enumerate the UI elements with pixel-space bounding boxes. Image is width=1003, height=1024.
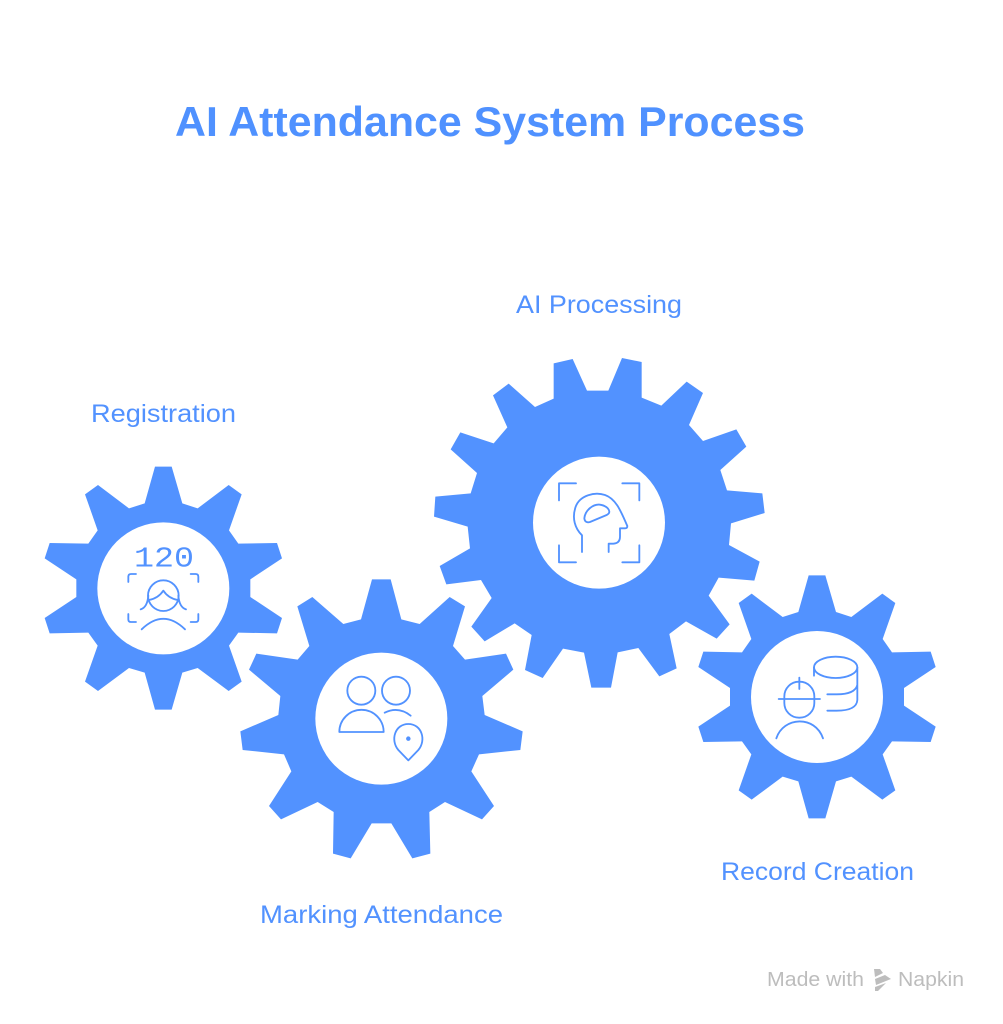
icon: people with location pin	[339, 677, 422, 760]
gear: Record Creation	[698, 575, 936, 818]
icon: Napkin logo	[874, 969, 891, 991]
label: Record Creation: Record Creation	[721, 858, 914, 886]
title: AI Attendance System Process	[175, 98, 805, 145]
icon: face scan with number: 120	[134, 543, 194, 576]
icon: face scan with number	[128, 543, 198, 629]
footer: Made with Napkin: Napkin	[898, 969, 964, 991]
icon: worker with database	[776, 657, 857, 738]
gear: AI Processing	[434, 358, 765, 688]
footer: Made with Napkin	[767, 969, 964, 991]
gear: Registration	[45, 467, 282, 710]
footer: Made with Napkin: Made with	[767, 969, 864, 991]
label: Registration: Registration	[91, 400, 236, 428]
icon: head with brain scan	[559, 483, 639, 562]
label: Marking Attendance: Marking Attendance	[260, 901, 503, 929]
gear: Marking Attendance	[240, 579, 523, 858]
label: AI Processing: AI Processing	[516, 291, 682, 319]
